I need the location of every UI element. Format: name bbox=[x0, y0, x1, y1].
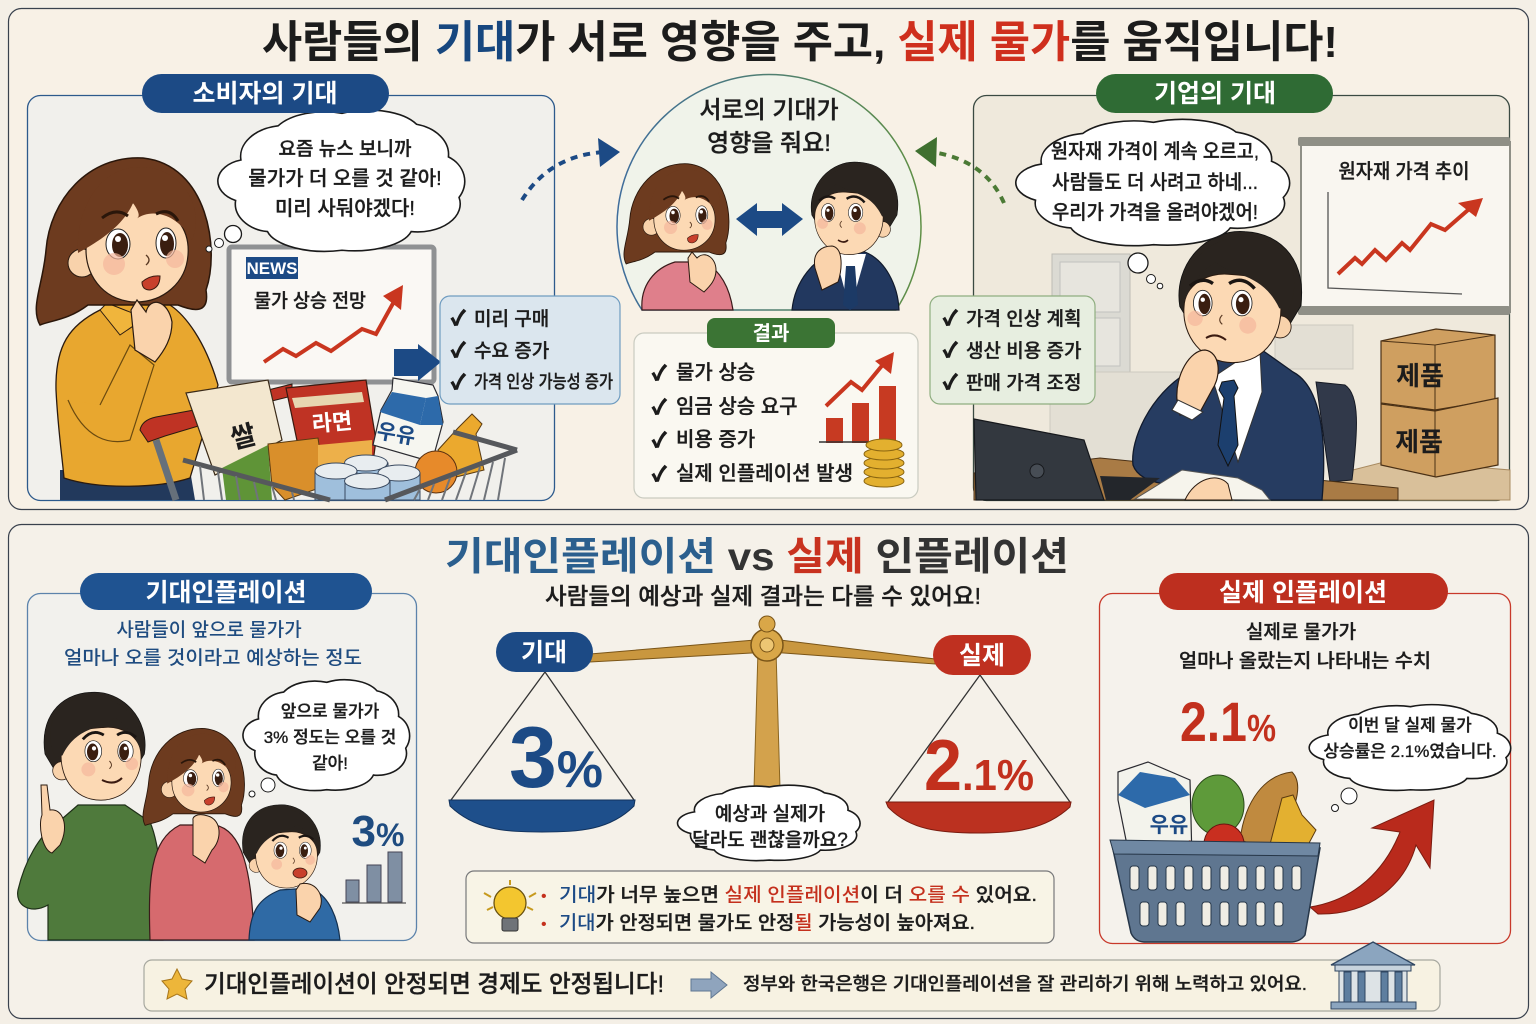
thought bubble: consumer: 요즘 뉴스 보니까 bbox=[279, 138, 412, 160]
checklist: company actions: 판매 가격 조정 bbox=[966, 372, 1081, 394]
thought bubble: consumer: 미리 사둬야겠다! bbox=[275, 197, 415, 220]
callout: tips: 기대가 너무 높으면 실제 인플레이션 이 더 오를 수 있어요. bbox=[559, 884, 1037, 906]
thought bubble: actual bbox=[1309, 705, 1511, 812]
illustration: woman bbox=[624, 164, 733, 310]
checklist: consumer actions bbox=[440, 296, 620, 404]
illustration: shopping cart with groceries: 우유 bbox=[375, 420, 417, 449]
banner: conclusion bbox=[144, 942, 1440, 1011]
checklist: company actions: ✓ bbox=[943, 308, 958, 330]
scale: expected pan bbox=[449, 632, 635, 832]
arrow: dashed blue bbox=[522, 138, 620, 200]
panel: result: ✓ bbox=[652, 397, 667, 419]
panel: result: 비용 증가 bbox=[676, 428, 755, 451]
panel: center mutual influence circle bbox=[617, 74, 921, 310]
banner: conclusion: 정부와 한국은행은 기대인플레이션을 잘 관리하기 위해 노력하고 있어요. bbox=[743, 974, 1307, 994]
thought bubble: question: 달라도 괜찮을까요? bbox=[692, 829, 848, 851]
illustration: product boxes: 제품 bbox=[1395, 427, 1443, 457]
thought bubble: family: 같아! bbox=[312, 754, 348, 773]
checklist: consumer actions: ✓ bbox=[451, 372, 466, 394]
illustration: family bbox=[18, 692, 340, 940]
checklist: consumer actions: ✓ bbox=[451, 340, 466, 362]
illustration: shopping cart with groceries: 라면 bbox=[311, 408, 353, 437]
heading pill: consumer: 소비자의 기대 bbox=[193, 80, 337, 108]
callout: tips bbox=[466, 871, 1054, 943]
icon: light bulb bbox=[484, 880, 536, 931]
panel: actual inflation: 얼마나 올랐는지 나타내는 수치 bbox=[1179, 650, 1431, 672]
stat: 2.1 percent: 2.1% bbox=[1180, 690, 1276, 753]
callout: tips: • bbox=[541, 916, 547, 933]
thought bubble: company: 원자재 가격이 계속 오르고, bbox=[1051, 140, 1259, 163]
panel: company expectations bbox=[930, 96, 1510, 500]
checklist: consumer actions: 가격 인상 가능성 증가 bbox=[474, 372, 613, 392]
illustration: grocery basket bbox=[1110, 762, 1320, 942]
checklist: company actions bbox=[930, 296, 1095, 404]
heading pill: expected: 기대인플레이션 bbox=[145, 579, 307, 607]
thought bubble: consumer: 물가가 더 오를 것 같아! bbox=[248, 167, 442, 190]
scale: actual pan: 실제 bbox=[959, 642, 1005, 670]
panel: consumer expectations bbox=[28, 96, 554, 500]
thought bubble: actual: 이번 달 실제 물가 bbox=[1348, 716, 1472, 735]
arrow: rising red bbox=[1310, 800, 1434, 914]
panel: result bbox=[634, 333, 918, 498]
scale: expected pan: 기대 bbox=[521, 639, 567, 667]
arrow: double headed bbox=[736, 203, 803, 236]
checklist: company actions: 생산 비용 증가 bbox=[966, 340, 1081, 362]
panel: result: ✓ bbox=[652, 464, 667, 486]
thought bubble: family: 앞으로 물가가 bbox=[281, 702, 380, 721]
panel: expected inflation: 얼마나 오를 것이라고 예상하는 정도 bbox=[64, 647, 362, 669]
panel: actual inflation bbox=[1100, 594, 1511, 944]
heading: comparison title: 기대인플레이션 vs 실제 인플레이션 bbox=[445, 536, 1069, 579]
illustration: news board: NEWS bbox=[246, 259, 298, 278]
panel: result: 임금 상승 요구 bbox=[676, 395, 798, 418]
illustration: product boxes: 제품 bbox=[1396, 361, 1444, 391]
illustration: laptop bbox=[974, 419, 1160, 500]
stat: 3 percent with bars: 3% bbox=[352, 807, 404, 856]
scale: expected pan: 3% bbox=[509, 710, 603, 806]
panel: center mutual influence circle: 영향을 줘요! bbox=[707, 130, 831, 157]
heading pill: result: 결과 bbox=[753, 322, 789, 345]
checklist: consumer actions: 수요 증가 bbox=[474, 340, 549, 362]
stat: 3 percent with bars bbox=[342, 807, 406, 903]
illustration: office background bbox=[1050, 254, 1353, 467]
panel: result: 실제 인플레이션 발생 bbox=[676, 462, 853, 485]
panel: actual inflation: 실제로 물가가 bbox=[1246, 621, 1356, 643]
heading pill: result bbox=[707, 318, 835, 348]
scale: actual pan: 2.1% bbox=[924, 726, 1034, 806]
banner: conclusion: 기대인플레이션이 안정되면 경제도 안정됩니다! bbox=[204, 971, 664, 998]
thought bubble: question: 예상과 실제가 bbox=[715, 803, 825, 825]
callout: tips: • bbox=[541, 888, 547, 905]
arrow: banner bbox=[691, 972, 727, 998]
heading pill: company bbox=[1096, 74, 1333, 113]
illustration: news board bbox=[229, 247, 434, 382]
panel: result: 물가 상승 bbox=[676, 361, 755, 384]
checklist: company actions: 가격 인상 계획 bbox=[966, 308, 1081, 330]
illustration: woman with yellow sweater bbox=[36, 158, 218, 500]
illustration: grocery basket: 우유 bbox=[1150, 814, 1188, 837]
illustration: price chart board: 원자재 가격 추이 bbox=[1338, 160, 1470, 183]
thought bubble: company: 우리가 가격을 올려야겠어! bbox=[1052, 201, 1258, 224]
thought bubble: company: 사람들도 더 사려고 하네... bbox=[1052, 171, 1258, 194]
illustration: shopping cart with groceries bbox=[140, 378, 517, 500]
callout: tips: 기대가 안정되면 물가도 안정 될 가능성이 높아져요. bbox=[559, 912, 975, 934]
arrow: dashed green bbox=[915, 137, 1004, 203]
thought bubble: consumer bbox=[206, 110, 465, 252]
heading pill: consumer bbox=[142, 74, 389, 113]
icon: bank building bbox=[1331, 942, 1416, 1009]
panel: result: ✓ bbox=[652, 363, 667, 385]
subtitle: 사람들의 예상과 실제 결과는 다를 수 있어요! bbox=[545, 583, 981, 609]
illustration: shopping cart with groceries: 쌀 bbox=[228, 419, 259, 455]
heading pill: actual bbox=[1159, 573, 1448, 610]
illustration: price chart board bbox=[1298, 137, 1510, 315]
scale: actual pan bbox=[886, 635, 1071, 833]
heading pill: expected bbox=[80, 573, 372, 610]
panel: expected inflation: 사람들이 앞으로 물가가 bbox=[116, 619, 302, 641]
thought bubble: question bbox=[678, 785, 860, 861]
icon: star bbox=[162, 969, 192, 999]
illustration: chair bbox=[1316, 382, 1356, 482]
arrow: consumer to result bbox=[394, 344, 441, 381]
heading pill: actual: 실제 인플레이션 bbox=[1219, 579, 1387, 607]
panel: center mutual influence circle: 서로의 기대가 bbox=[699, 97, 839, 124]
thought bubble: actual: 상승률은 2.1%였습니다. bbox=[1323, 742, 1497, 761]
illustration: product boxes bbox=[1337, 329, 1510, 500]
panel: result: ✓ bbox=[652, 430, 667, 452]
illustration: news board: 물가 상승 전망 bbox=[254, 290, 366, 312]
panel: top section bbox=[8, 8, 1528, 510]
panel: expected inflation bbox=[18, 594, 416, 940]
heading pill: company: 기업의 기대 bbox=[1154, 80, 1276, 108]
thought bubble: family bbox=[243, 680, 410, 797]
checklist: consumer actions: ✓ bbox=[451, 308, 466, 330]
checklist: company actions: ✓ bbox=[943, 372, 958, 394]
thought bubble: family: 3% 정도는 오를 것 bbox=[264, 728, 396, 747]
chart icon: rising bars and coins bbox=[819, 352, 904, 487]
illustration: man in suit bbox=[1133, 231, 1324, 500]
thought bubble: company bbox=[1016, 119, 1290, 289]
illustration: desk bbox=[974, 458, 1398, 500]
title: 사람들의 기대가 서로 영향을 주고, 실제 물가를 움직입니다! bbox=[262, 18, 1338, 67]
panel: bottom section bbox=[8, 524, 1528, 1018]
checklist: company actions: ✓ bbox=[943, 340, 958, 362]
illustration: man in suit bbox=[792, 162, 899, 310]
illustration: balance scale bbox=[449, 616, 1071, 858]
checklist: consumer actions: 미리 구매 bbox=[474, 308, 549, 330]
